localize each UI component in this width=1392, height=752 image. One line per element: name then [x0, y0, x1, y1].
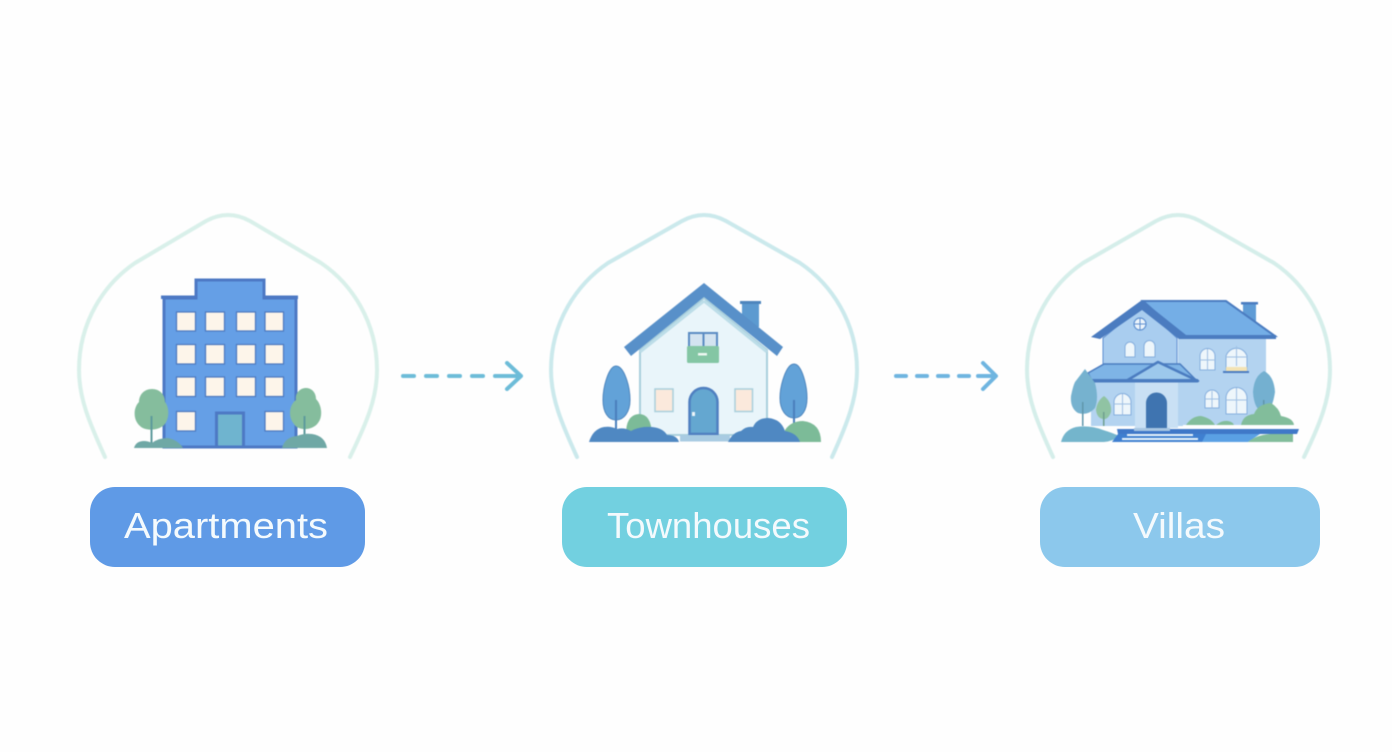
icon: chimney — [740, 301, 761, 327]
icon: porch roof — [1088, 362, 1198, 382]
arch outline: townhouses — [551, 215, 857, 457]
icon: villa — [1061, 300, 1299, 442]
villa walls — [1091, 306, 1266, 428]
icon: right tree — [780, 364, 807, 428]
icon: apartment building — [134, 280, 327, 448]
icon: teal mound — [1061, 426, 1119, 442]
icon: left tree — [603, 366, 630, 430]
window balcony — [1223, 367, 1249, 373]
icon: villa door — [1146, 393, 1167, 428]
label pill: villas — [1040, 487, 1320, 567]
round attic window — [1134, 318, 1146, 330]
icon: blue shrubs left — [589, 427, 679, 442]
arrow: townhouses to villas — [896, 363, 996, 389]
label pill: apartments — [90, 487, 365, 567]
arch outline: apartments — [79, 215, 377, 457]
label text: villas: Villas — [1133, 505, 1225, 546]
icon: chimney — [1241, 302, 1258, 324]
icon: trees — [1071, 369, 1275, 426]
arch outline: villas — [1027, 215, 1330, 457]
label pill: townhouses — [562, 487, 847, 567]
villa windows — [1114, 340, 1247, 415]
icon: green shrubs — [626, 414, 821, 442]
icon: green shrubs — [1186, 403, 1294, 425]
icon: townhouse — [589, 283, 821, 442]
label text: apartments: Apartments — [124, 505, 328, 546]
panel: townhouses — [551, 215, 857, 567]
icon: main roof — [1091, 300, 1276, 339]
icon: blue shrubs right — [728, 418, 800, 442]
upper window with green balcony — [687, 333, 719, 363]
arrow: apartments to townhouses — [403, 363, 521, 389]
icon: front door — [690, 388, 718, 434]
icon: right tree — [282, 388, 327, 448]
panel: villas — [1027, 215, 1330, 567]
label text: townhouses: Townhouses — [607, 505, 810, 546]
icon: roof — [624, 283, 783, 356]
icon: driveway and pool — [1112, 428, 1299, 442]
panel: apartments — [79, 215, 377, 567]
icon: left tree — [134, 389, 183, 448]
